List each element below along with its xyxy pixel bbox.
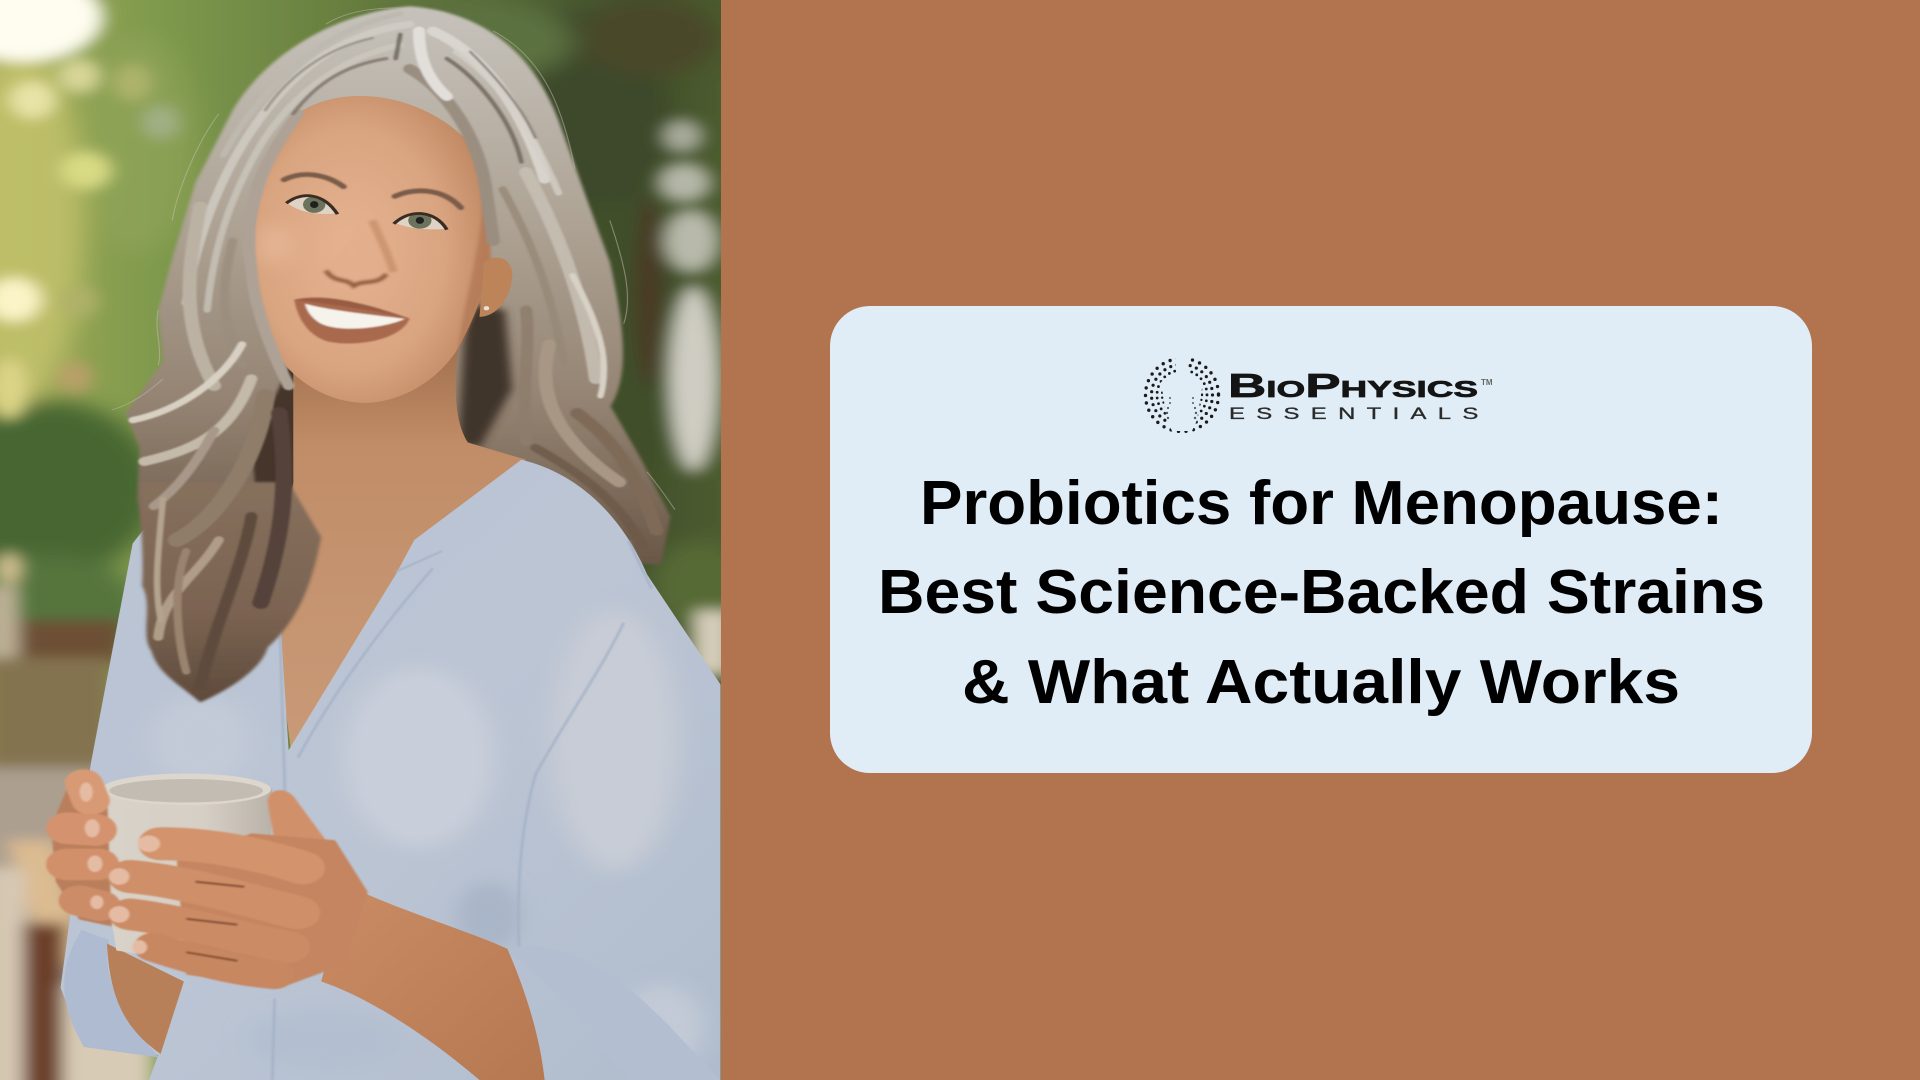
mug [101, 773, 272, 954]
eyebrows [284, 175, 461, 208]
hair: back mass [126, 6, 670, 565]
title: Best Science-Backed Strains [878, 558, 1765, 627]
nose [321, 220, 393, 286]
blurred garden background [0, 0, 754, 1080]
title [878, 469, 1765, 717]
logo: BioPhysics Essentials [1146, 353, 1493, 432]
forearms [107, 885, 545, 1080]
hair: shadow behind neck [459, 303, 512, 448]
hair: front strands [133, 14, 656, 685]
panel: title card [830, 306, 1812, 773]
hair: flyaway wisps [112, 8, 675, 510]
title: & What Actually Works [962, 648, 1680, 717]
photo: smiling woman holding a mug [0, 0, 721, 1080]
eyes [286, 196, 447, 230]
icon: dotted circle with human figure [1146, 353, 1218, 432]
face [250, 96, 492, 403]
trademark: TM [1481, 378, 1493, 387]
smile [294, 298, 410, 344]
traced photo group [0, 0, 754, 1080]
logo wordmark: B IO P HYSICS [1228, 367, 1478, 404]
logo tagline: ESSENTIALS [1229, 405, 1478, 423]
hair: front lock over shirt [140, 482, 321, 703]
neck and chest [272, 344, 526, 750]
linen shirt [61, 460, 721, 1080]
hands [51, 782, 368, 988]
ear with stud earring [479, 258, 512, 317]
title: Probiotics for Menopause: [920, 469, 1723, 538]
